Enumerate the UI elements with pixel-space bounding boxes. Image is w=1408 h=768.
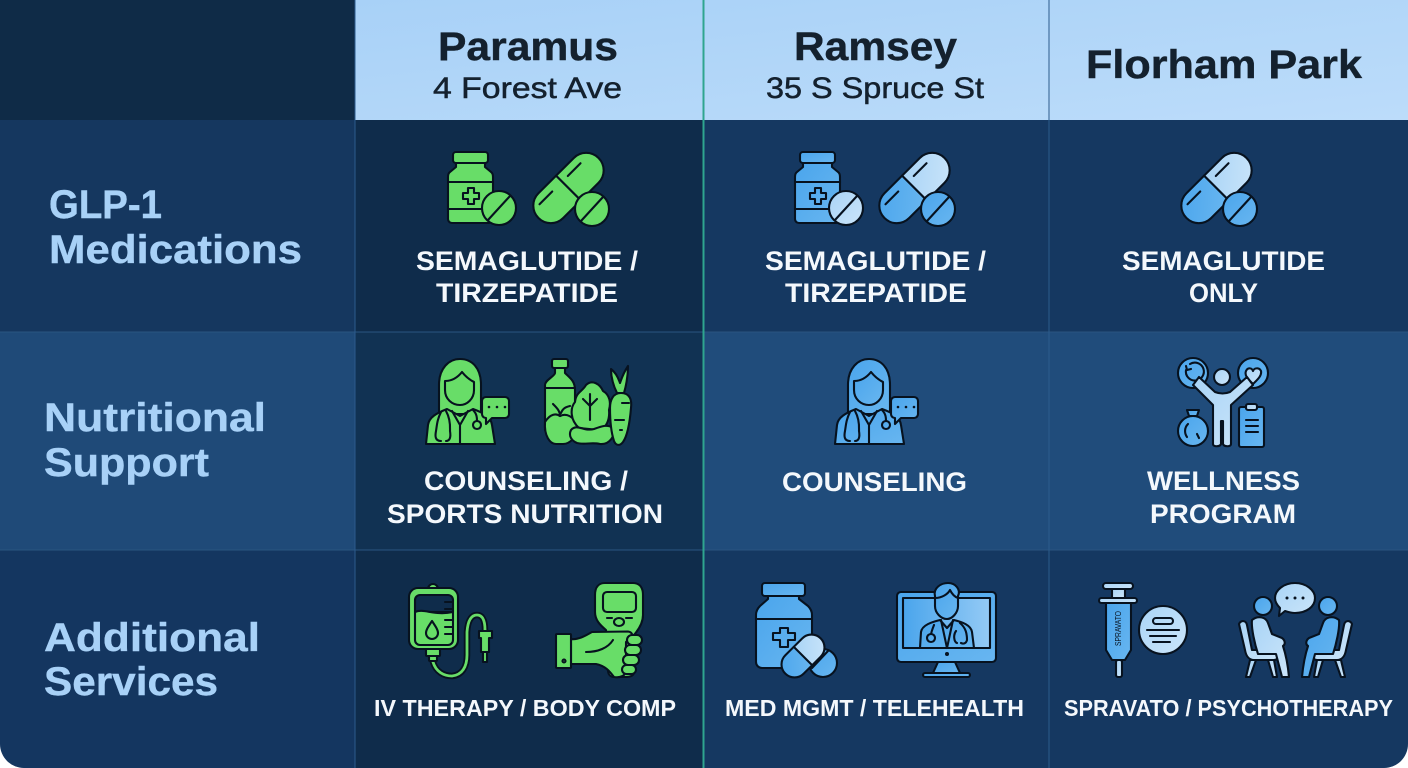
column header: Ramsey	[766, 25, 985, 105]
text: Ramsey nutrition: COUNSELING	[782, 467, 967, 497]
row label: Additional Services: Additional	[44, 616, 260, 660]
icon: green capsule with tablet	[532, 152, 610, 227]
column header: Paramus: Paramus	[438, 25, 618, 69]
text: Paramus nutrition	[388, 470, 662, 524]
row label: Nutritional Support: Nutritional	[44, 396, 266, 440]
icon: medicine bottle with capsule	[756, 583, 837, 683]
column header: Florham Park: Florham Park	[1086, 43, 1363, 87]
text: Ramsey services: MED MGMT / TELEHEALTH	[725, 695, 1024, 721]
text: Florham Park GLP-1: ONLY	[1189, 278, 1258, 308]
column header: Ramsey: 35 S Spruce St	[766, 72, 985, 105]
text: Paramus nutrition: SPORTS NUTRITION	[387, 499, 663, 529]
icon: Florham Park capsule with tablet	[1180, 152, 1258, 227]
text: Florham Park nutrition	[1147, 471, 1299, 524]
text: Florham Park nutrition: WELLNESS	[1147, 466, 1300, 496]
row label: GLP-1 Medications: GLP-1	[49, 183, 162, 227]
text: Florham Park GLP-1	[1122, 251, 1324, 302]
column header: Paramus: 4 Forest Ave	[433, 72, 622, 105]
row label: GLP-1 Medications: Medications	[49, 228, 302, 272]
row label: GLP-1 Medications	[50, 190, 300, 264]
icon: green healthy food with bottle	[545, 359, 631, 445]
text: Paramus nutrition: COUNSELING /	[424, 466, 629, 496]
row label: Nutritional Support: Support	[44, 441, 209, 485]
icon: green clinician with speech bubble	[426, 359, 509, 444]
icon: hand holding body composition device	[556, 583, 643, 677]
column header: Ramsey: Ramsey	[794, 25, 958, 69]
row label: Additional Services	[44, 622, 258, 696]
icon: green medicine bottle with tablet	[448, 152, 516, 225]
icon: blue capsule with tablet	[878, 152, 956, 227]
row label: Additional Services: Services	[44, 660, 218, 704]
text: Ramsey GLP-1	[766, 250, 986, 302]
text: Ramsey GLP-1: TIRZEPATIDE	[785, 278, 967, 308]
icon: two people in therapy conversation	[1239, 583, 1352, 677]
icon: telehealth monitor with doctor	[897, 583, 996, 677]
icon: wellness figure with stopwatch and clipboard	[1178, 358, 1268, 447]
text: Paramus GLP-1: SEMAGLUTIDE /	[416, 246, 639, 276]
text: Paramus GLP-1: TIRZEPATIDE	[436, 278, 618, 308]
icon: Spravato syringe with tablet: SPRAVATO	[1114, 611, 1123, 646]
text: Florham Park services: SPRAVATO / PSYCHOTHERAPY	[1064, 695, 1393, 721]
text: Ramsey GLP-1: SEMAGLUTIDE /	[765, 246, 987, 276]
text: Paramus GLP-1	[416, 250, 638, 302]
icon: Spravato syringe with tablet	[1099, 583, 1187, 677]
row label: Nutritional Support	[44, 396, 266, 485]
icon: IV bag with tube	[409, 584, 492, 676]
text: Florham Park GLP-1: SEMAGLUTIDE	[1122, 246, 1325, 276]
icon: blue medicine bottle with tablet	[795, 152, 863, 225]
column header: Paramus	[434, 32, 621, 98]
text: Paramus services: IV THERAPY / BODY COMP	[374, 695, 676, 721]
icon: blue clinician with speech bubble	[835, 359, 918, 444]
text: Florham Park nutrition: PROGRAM	[1150, 499, 1296, 529]
